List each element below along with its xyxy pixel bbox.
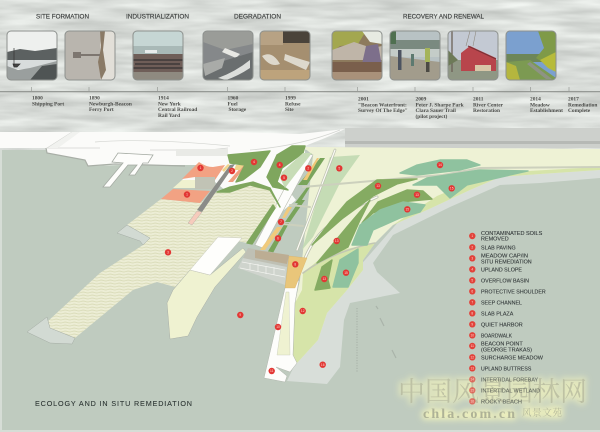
timeline label 1960: Fuel [228,101,238,107]
timeline label 2009: 2009 [416,97,426,103]
map number markers: 15 [450,186,454,190]
watermark: 风景文苑 [522,405,562,419]
contaminated soils areas [161,162,245,203]
grey road band [345,128,600,148]
legend: UPLAND SLOPE [481,267,522,273]
map number markers: 14 [438,163,442,167]
photo: refuse site 1999 [260,31,310,80]
timeline label 1914: 1914 [158,96,169,102]
photo: ferry port 1890 [65,31,115,80]
timeline label 2009: (pilot project) [416,113,447,120]
watermark: chla.com.cn [423,407,515,422]
pale upland tongue [167,248,246,339]
map number markers: 13 [376,184,380,188]
timeline label 1890: 1890 [89,96,100,102]
photo: shipping port 1800 [7,31,57,80]
plaza structure [238,248,289,285]
legend: 6 [471,290,473,294]
legend: SEEP CHANNEL [481,300,522,306]
legend: MEADOW CAP/IN [481,254,528,260]
slab fringe beaches [27,225,150,344]
intertidal forebay and wetland teal [333,160,528,287]
slab plaza yellow [285,256,307,288]
timeline label 1800: Shipping Port [32,101,64,107]
photo: river center barn 2011 [448,31,498,80]
map number markers: 2 [231,169,233,173]
timeline label 2001: Survey Of The Edge" [358,108,408,114]
photo: waterfront survey 2001 [332,31,382,80]
timeline label 1999: Site [285,107,294,113]
legend: SLAB PAVING [481,246,516,252]
map number markers: 15 [406,208,409,212]
legend: SLAB PLAZA [481,311,514,317]
upland slope greens [217,146,305,244]
map number markers: 5 [283,176,285,180]
timeline label 1890: Ferry Port [89,107,114,113]
timeline label 2014: 2014 [530,97,541,103]
timeline label 1914: New York [158,101,181,107]
heading: recovery and renewal: RECOVERY AND RENEWAL [403,14,484,21]
legend: INTERTIDAL WETLAND [481,388,540,394]
timeline label 2009: Clara Sauer Trail [416,108,456,114]
timeline label 2001: 2001 [358,97,369,103]
photo: sharpe park trail 2009 [390,31,440,80]
overflow basin [280,153,312,188]
legend: (GEORGE TRAKAS) [481,347,532,353]
legend: UPLAND BUTTRESS [481,366,532,372]
timeline label 2011: 2011 [473,97,483,103]
pier [103,153,153,187]
map title: ECOLOGY AND IN SITU REMEDIATION [35,399,192,408]
timeline label 1800: 1800 [32,96,43,102]
map number markers: 6 [277,236,279,240]
east land upper meadow [293,147,600,363]
legend: 13 [471,366,474,370]
legend: SURCHARGE MEADOW [481,355,544,361]
legend: 5 [471,278,473,282]
legend: 1 [471,234,473,238]
rocky beach shoreline [287,165,600,384]
legend: 16 [471,400,474,404]
map number markers: 10 [276,325,280,329]
legend: 7 [471,300,473,304]
map number markers: 13 [335,239,339,243]
map number markers: 13 [323,277,326,281]
timeline label 1890: Newburgh-Beacon [89,101,132,107]
map number markers: 2 [307,166,309,170]
map number markers: 7 [280,220,282,224]
map number markers: 8 [294,262,296,266]
legend: 4 [471,268,473,272]
boardwalk and beacon point [264,280,299,382]
timeline label 2011: River Center [473,102,504,108]
photo: fuel storage 1960 [203,31,253,80]
legend: ROCKY BEACH [481,399,522,405]
timeline label 1914: Rail Yard [158,113,180,119]
timeline label 2014: Meadow [530,102,550,108]
capped soils slab [47,182,277,338]
legend: 8 [471,312,473,316]
legend: INTERTIDAL FOREBAY [481,377,538,383]
map number markers: 9 [239,313,241,317]
heading: degradation: DEGRADATION [234,14,281,21]
path network [283,150,600,290]
map number markers: 3 [167,250,169,254]
map number markers: 1 [200,166,202,170]
protective shoulder and seep channel strips [260,158,325,253]
legend: PROTECTIVE SHOULDER [481,289,546,295]
timeline label 2001: "Beacon Waterfront: [358,102,407,108]
timeline label 1960: Storage [228,107,247,113]
timeline label 1960: 1960 [228,96,238,102]
legend: QUIET HARBOR [481,322,523,328]
timeline label 1914: Central Railroad [158,107,197,113]
timeline label 1999: 1999 [285,96,296,102]
legend: 11 [471,344,474,348]
map number markers: 1 [186,193,188,197]
timeline label 2017: Complete [568,108,591,114]
legend: 2 [471,246,473,250]
white panel [190,237,242,275]
legend: BOARDWALK [481,333,512,339]
map number markers: 5 [338,166,340,170]
photo: meadow establishment 2014 [506,31,556,80]
timeline label 2017: 2017 [568,97,579,103]
legend: OVERFLOW BASIN [481,278,529,284]
map number markers: 4 [253,160,255,164]
photo: rail yard 1914 [133,31,183,80]
legend: BEACON POINT [481,342,523,348]
heading: industrialization: INDUSTRIALIZATION [126,14,189,21]
white promenade strip [255,153,313,248]
map number markers: 12 [301,309,305,313]
map number markers: 11 [270,369,274,373]
timeline label 2009: Peter J. Sharpe Park [416,102,464,108]
legend: SITU REMEDIATION [481,259,532,265]
legend: 3 [471,256,473,260]
legend: 10 [471,334,474,338]
legend: 15 [471,388,474,392]
timeline label 1999: Refuse [285,101,301,107]
legend: 14 [471,378,474,382]
timeline label 2014: Establishment [530,108,563,114]
legend: 12 [471,356,474,360]
timeline axis [0,87,600,92]
legend: CONTAMINATED SOILS [481,231,543,237]
map number markers: 15 [344,271,348,275]
surcharge meadow pale green [293,167,600,363]
textured top band [0,0,600,150]
legend: REMOVED [481,237,509,243]
riprap dots in water [357,306,396,372]
left and bottom paper margin [0,148,600,432]
upland buttress greens [312,179,432,290]
map number markers [165,159,455,374]
watermark: 中国风景园林网 [398,370,587,409]
legend [469,231,546,405]
map number markers: 4 [279,163,281,167]
shoreline road and white land [0,129,345,215]
timeline label 2011: Restoration [473,108,500,114]
map number markers: 13 [415,193,419,197]
timeline label 2017: Remediation [568,102,597,108]
slab paving strip [188,164,235,225]
legend: 9 [471,322,473,326]
heading: site formation: SITE FORMATION [36,14,89,21]
map number markers: 16 [321,363,325,367]
overflow wedge [302,155,360,250]
photo frames [7,31,556,80]
